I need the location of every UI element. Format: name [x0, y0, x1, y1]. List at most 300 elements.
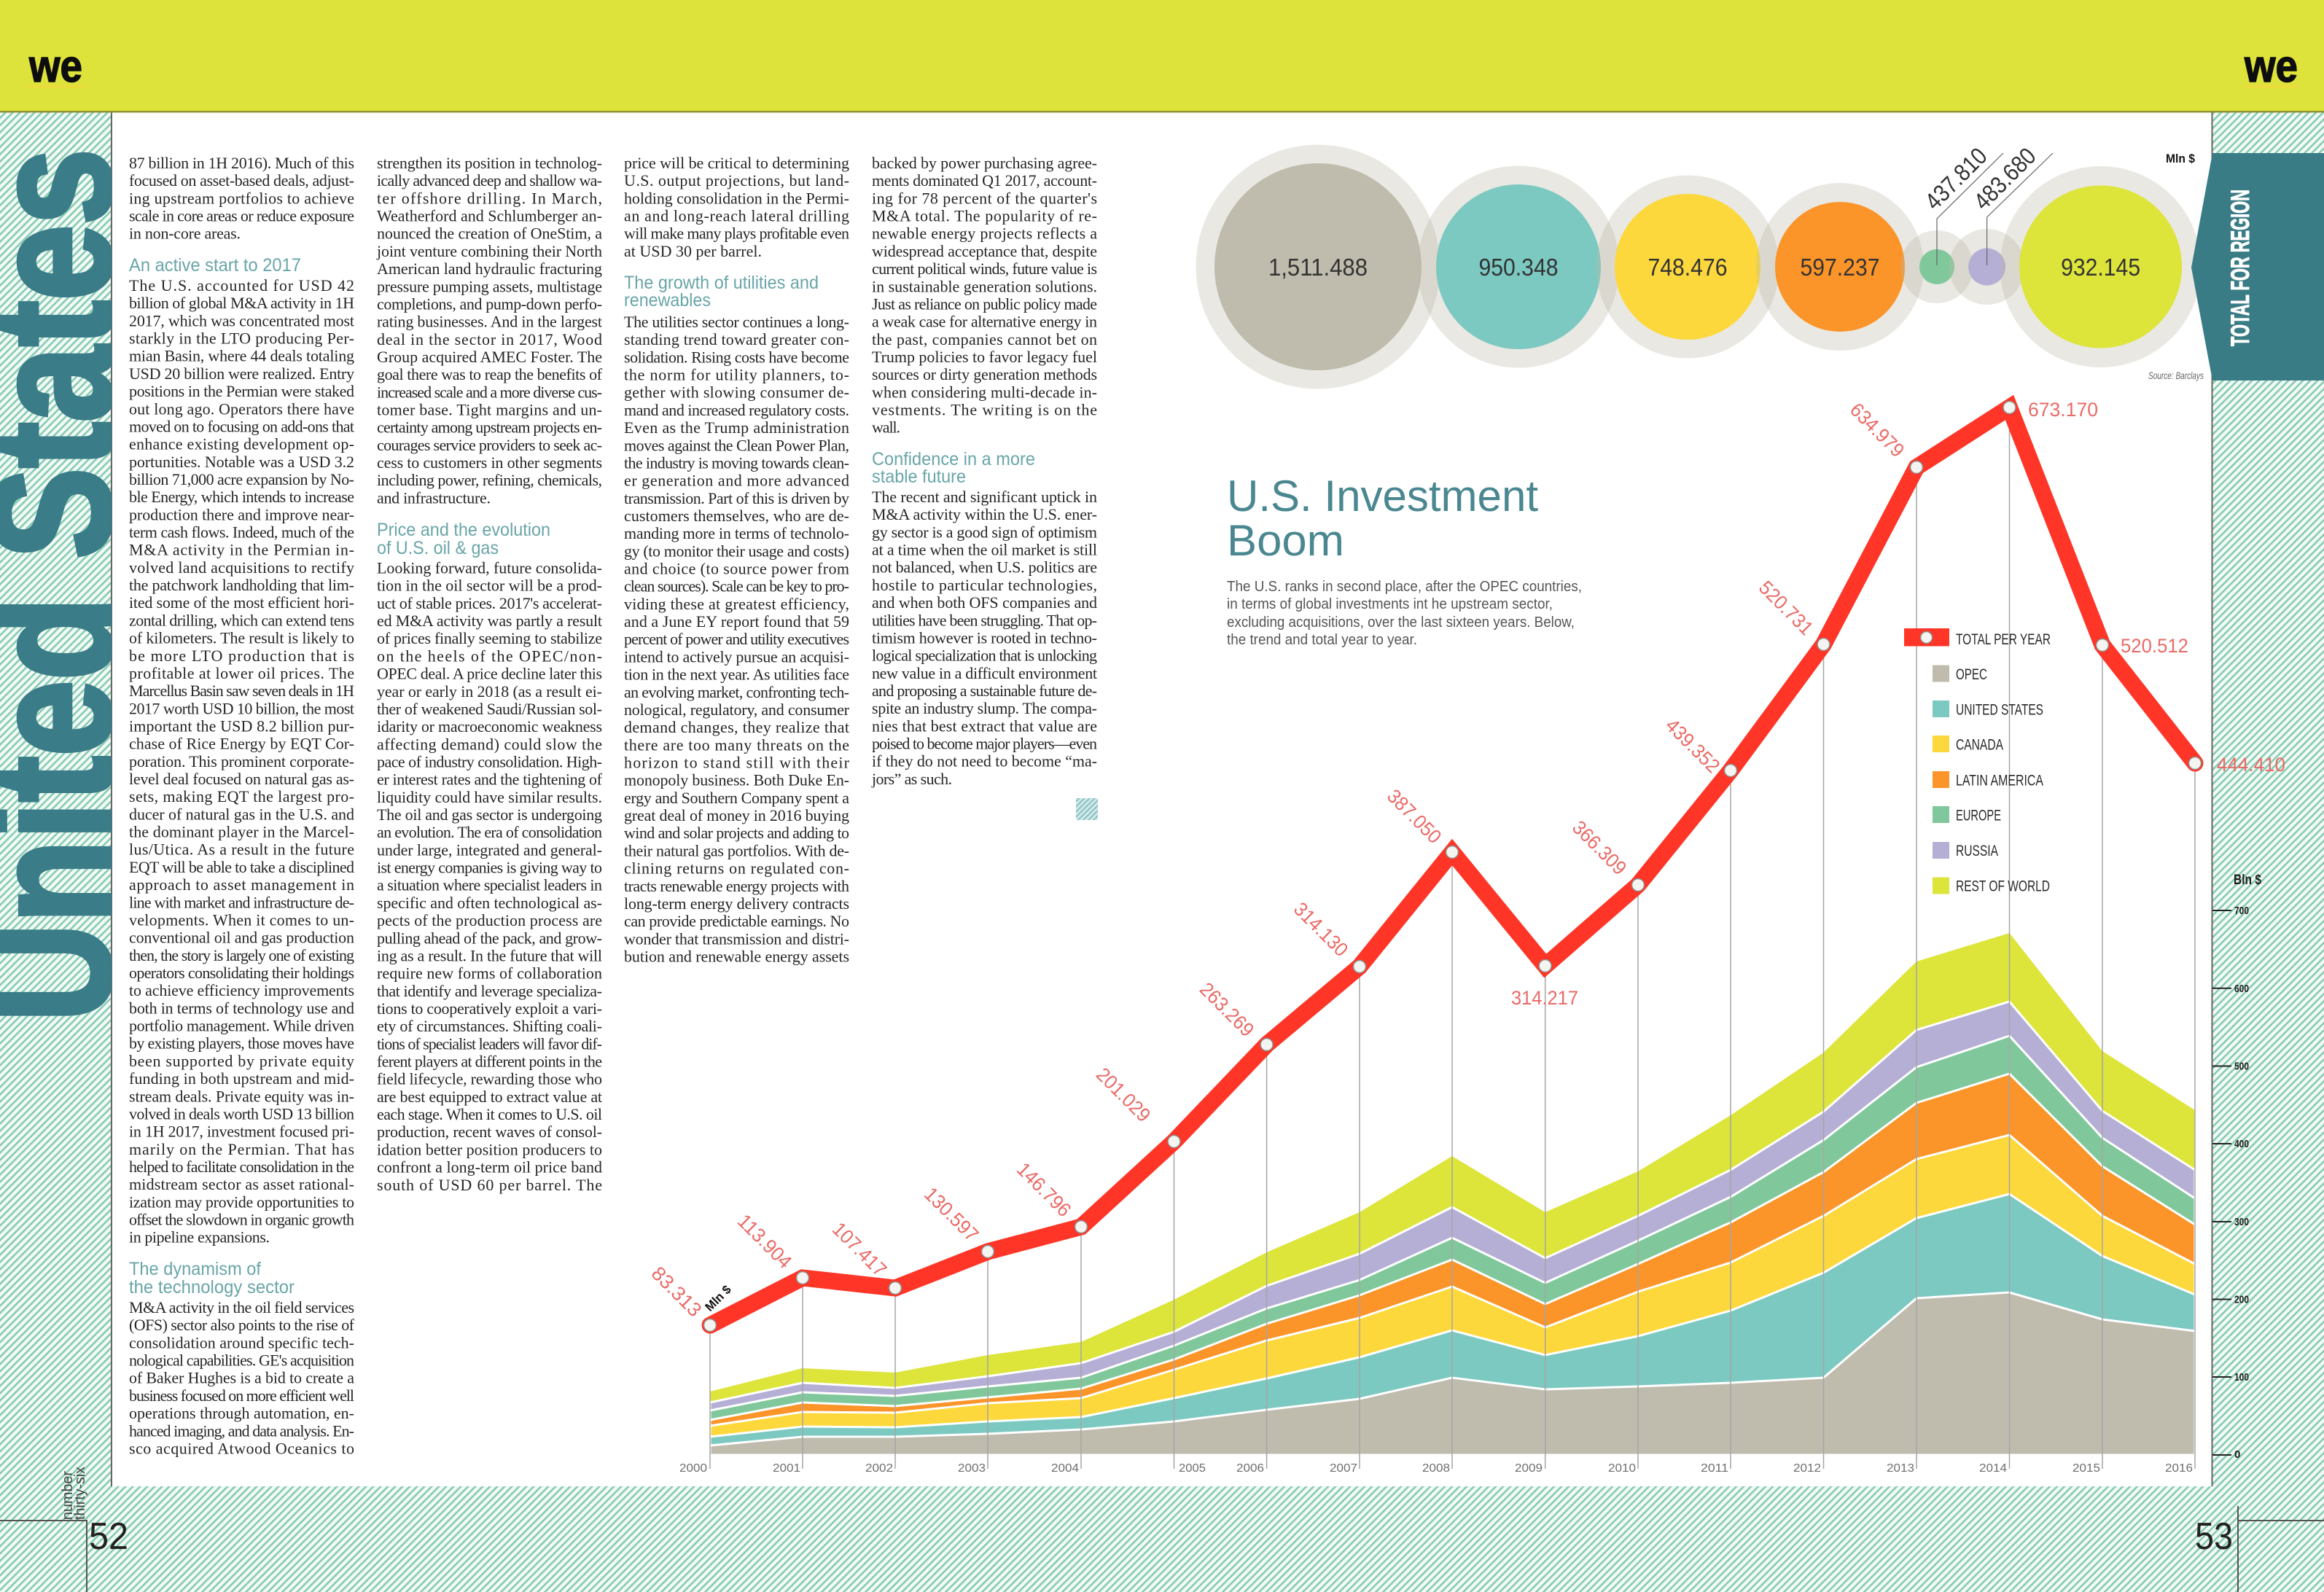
text block: column 4 main: and proposing a sustainable future de-: [872, 682, 1097, 700]
data value labels: 263.269: [1196, 978, 1258, 1041]
red total line: [710, 407, 2195, 1325]
area: Canada: [710, 1135, 2195, 1455]
text block: column 1 final: [129, 1298, 355, 1457]
heading: The growth of utilities and renewables: The growth of utilities and: [624, 273, 819, 293]
data value labels: 107.417: [828, 1218, 891, 1281]
text block: column 1 main: offset the slowdown in organic growth: [129, 1210, 354, 1229]
year labels: 2000: [679, 1462, 707, 1475]
side tab: total for region: TOTAL FOR REGION: [2226, 190, 2255, 346]
intro paragraph: [1227, 579, 1582, 648]
text block: column 4 main: not balanced, when U.S. politics are: [872, 558, 1097, 577]
year labels: 2004: [1051, 1462, 1079, 1475]
legend item: Russia: [1933, 842, 1998, 859]
issue label: number thirty-six: thirty-six: [72, 1467, 88, 1520]
bubble values: 748.476: [1648, 254, 1728, 281]
text block: column 2 top: joint venture combining their North: [376, 242, 602, 260]
text block: column 3 main: demand changes, they realize that: [624, 718, 849, 736]
text block: column 1 main: midstream sector as asset rational-: [129, 1175, 354, 1193]
text block: column 4 main: at a time when the oil market is still: [872, 541, 1097, 558]
text block: column 1 main: The U.S. accounted for USD 42: [129, 276, 354, 294]
year labels: [679, 1462, 2193, 1475]
text block: column 3 main: clean sources). Scale can be key to pro-: [624, 577, 849, 596]
text block: column 3 main: transmission. Part of this is driven by: [624, 489, 849, 507]
text block: column 3 main: Even as the Trump administration: [624, 418, 849, 437]
text block: column 1 main: volved land acquisitions to rectify: [129, 558, 354, 577]
text block: column 1 final: sco acquired Atwood Oceanics to: [129, 1439, 354, 1457]
bubble values: [1268, 142, 2140, 281]
text block: column 2 main: ety of circumstances. Shifting coali-: [377, 1017, 602, 1035]
text block: column 4 main: poised to become major players—even: [872, 735, 1097, 752]
text block: column 1 main: term cash flows. Indeed, much of the: [129, 523, 354, 541]
text block: column 3 main: standing trend toward greater con-: [624, 330, 849, 348]
heading: The growth of utilities and renewables: renewables: [624, 290, 711, 311]
leader lines for small bubbles: [1937, 153, 2053, 265]
side tab: total for region: [2191, 153, 2324, 381]
text block: column 3 top: holding consolidation in the Permi-: [624, 189, 849, 207]
text block: column 1 main: EQT will be able to take a disciplined: [129, 858, 354, 876]
text block: column 1 main: be more LTO production that is: [129, 647, 354, 665]
text block: column 4 main: timism however is rooted in techno-: [872, 628, 1097, 647]
text block: column 4 main: new value in a difficult environment: [872, 664, 1097, 682]
text block: column 1 main: moved on to focusing on add-ons that: [129, 417, 354, 435]
data value labels: 201.029: [1092, 1064, 1155, 1126]
text block: column 3 main: bution and renewable energy assets: [624, 948, 849, 965]
text block: column 1 main: poration. This prominent corporate-: [129, 752, 354, 770]
issue label: number thirty-six: number: [60, 1471, 76, 1520]
text block: column 1 main: sets, making EQT the largest pro-: [129, 787, 354, 805]
y axis scale: 700: [2234, 905, 2249, 917]
text block: column 1 main: approach to asset management in: [129, 875, 354, 894]
bubble: United States: [1417, 166, 1620, 367]
text block: column 2 main: production, recent waves of consol-: [377, 1123, 602, 1141]
year labels: 2006: [1236, 1462, 1264, 1475]
text block: column 2 main: require new forms of collaboration: [377, 964, 602, 983]
text block: column 1 main: both in terms of technology use and: [129, 999, 354, 1017]
year labels: 2007: [1330, 1462, 1357, 1475]
legend item: Rest of World: [1933, 878, 2050, 895]
text block: column 2 main: field lifecycle, rewarding those who: [377, 1070, 602, 1088]
text block: column 2 main: year or early in 2018 (as a result ei-: [377, 682, 602, 701]
intro paragraph: excluding acquisitions, over the last sixteen years. Below,: [1227, 614, 1575, 631]
text block: column 4 main: jors” as such.: [871, 770, 952, 788]
intro paragraph: the trend and total year to year.: [1227, 632, 1417, 648]
y axis scale: 200: [2234, 1293, 2249, 1306]
legend item: Canada: [1933, 735, 2003, 754]
heading: The dynamism of the technology sector: The dynamism of: [129, 1259, 261, 1279]
legend item: Latin America: LATIN AMERICA: [1956, 773, 2043, 789]
text block: column 4 main: hostile to particular technologies,: [872, 576, 1097, 594]
text block: column 1 main: the dominant player in the Marcel-: [129, 823, 354, 841]
text block: column 1 main: by existing players, those moves have: [129, 1034, 354, 1053]
text block: column 3 main: moves against the Clean Power Plan,: [624, 436, 849, 454]
text block: column 4 main: M&A activity within the U.S. ener-: [872, 505, 1097, 523]
data value labels: 146.796: [1013, 1158, 1075, 1221]
heading: Confidence in a more stable future: [872, 449, 1035, 487]
text block: column 1 main: line with market and infrastructure de-: [129, 893, 354, 911]
text block: column 3 main: percent of power and utility executives: [624, 630, 849, 648]
heading: Price and the evolution of U.S. oil & gas: Price and the evolution: [377, 520, 550, 540]
bubble: Europe: [1900, 230, 1973, 303]
text block: column 3 main: gether with slowing consumer de-: [624, 383, 849, 402]
text block: column 3 main: solidation. Rising costs have become: [624, 348, 849, 366]
text block: column 3 main: nological, regulatory, and consumer: [624, 701, 850, 719]
text block: column 3 main: er generation and more advanced: [624, 472, 849, 490]
text block: column 2 top: and infrastructure.: [377, 488, 491, 507]
text block: column 2 top: courages service providers to seek ac-: [377, 436, 602, 454]
year labels: 2015: [2073, 1462, 2100, 1475]
text block: column 1 main: important the USD 8.2 billion pur-: [129, 717, 354, 735]
legend item: OPEC: [1933, 665, 1987, 683]
text block: column 1 final: consolidation around specific tech-: [129, 1333, 354, 1351]
y axis scale: 100: [2234, 1371, 2249, 1384]
text block: column 2 top: [376, 154, 603, 507]
text block: column 1 final: operations through automation, en-: [129, 1404, 354, 1422]
text block: column 2 main: ferent players at different points in the: [377, 1053, 602, 1070]
text block: column 4 top: newable energy projects reflects a: [872, 225, 1097, 243]
text block: column 1 main: the patchwork landholding that lim-: [129, 576, 354, 594]
data value labels: 366.309: [1568, 816, 1631, 879]
text block: column 1 main: positions in the Permian were staked: [129, 382, 354, 400]
bubble: Latin America: [1756, 183, 1924, 351]
text block: column 1 main: starkly in the LTO producing Per-: [129, 329, 354, 347]
text block: column 2 top: certainty among upstream projects en-: [377, 418, 602, 437]
y axis scale: [2212, 873, 2261, 1461]
text block: column 1 main: volved in deals worth USD 13 billion: [129, 1104, 354, 1123]
text block: column 1 main: enhance existing development op-: [129, 435, 354, 453]
text block: column 3 top: an and long-reach lateral drilling: [624, 207, 849, 225]
text block: column 3 main: long-term energy delivery contracts: [624, 894, 849, 913]
text block: column 4 top: current political winds, future value is: [872, 260, 1097, 278]
text block: column 4 top: when considering multi-decade in-: [872, 383, 1097, 401]
text block: column 2 main: idarity or macroeconomic weakness: [377, 717, 602, 735]
data value labels: 634.979: [1846, 399, 1908, 461]
bubble: Rest of World: [2000, 166, 2202, 367]
text block: column 4 main: logical specialization that is unlocking: [872, 647, 1097, 665]
text block: column 2 main: uct of stable prices. 2017's accelerat-: [377, 594, 602, 612]
text block: column 1 main: billion of global M&A activity in 1H: [129, 294, 354, 312]
issue label: number thirty-six: [60, 1467, 88, 1520]
text block: column 3 main: and choice (to source power from: [624, 560, 849, 577]
text block: column 2 top: Weatherford and Schlumberger an-: [377, 207, 602, 225]
text block: column 1 main: Marcellus Basin saw seven deals in 1H: [129, 682, 354, 700]
text block: column 3 main: ergy and Southern Company spent a: [624, 789, 849, 807]
text block: column 1 main: level deal focused on natural gas as-: [129, 770, 354, 788]
text block: column 2 main: tion in the oil sector will be a prod-: [377, 577, 602, 595]
text block: column 1 intro: ing upstream portfolios to achieve: [129, 189, 354, 207]
text block: column 2 main: each stage. When it comes to U.S. oil: [377, 1105, 602, 1123]
y axis scale: 400: [2234, 1138, 2249, 1150]
text block: column 2 top: increased scale and a more diverse cus-: [377, 383, 602, 401]
text block: column 3 main: intend to actively pursue an acquisi-: [624, 647, 849, 666]
text block: column 1 main: then, the story is largely one of existing: [129, 946, 354, 964]
y axis ticks: [2212, 910, 2231, 1455]
text block: column 1 main: [129, 276, 354, 1246]
text block: column 2 top: ically advanced deep and shallow wa-: [377, 171, 602, 190]
heading: Confidence in a more stable future: stable future: [872, 467, 966, 487]
text block: column 2 top: cess to customers in other segments: [377, 453, 602, 472]
text block: column 3 main: great deal of money in 2016 buying: [624, 806, 849, 824]
text block: column 1 main: 2017 worth USD 10 billion, the most: [129, 699, 354, 717]
y axis scale: 600: [2234, 983, 2249, 995]
area: Latin America: [710, 1074, 2195, 1455]
text block: column 1 main: USD 20 billion were realized. Entry: [129, 364, 354, 383]
folio left: 52: 52: [89, 1515, 128, 1558]
legend: [1904, 628, 2051, 895]
area: Europe: [710, 1036, 2195, 1455]
title: [1227, 472, 1538, 565]
text block: column 1 main: lus/Utica. As a result in the future: [129, 840, 354, 859]
bubble values: 483.680: [1968, 142, 2041, 215]
legend item: Europe: [1933, 806, 2001, 824]
text block: column 2 main: OPEC deal. A price decline later this: [377, 665, 602, 683]
text block: column 2 main: pulling ahead of the pack, and grow-: [377, 929, 602, 947]
text block: column 2 main: of prices finally seeming to stabilize: [377, 629, 602, 647]
text block: column 2 main: south of USD 60 per barrel. The: [377, 1176, 602, 1194]
text block: column 1 main: chase of Rice Energy by EQT Cor-: [129, 735, 354, 753]
text block: column 4 top: in sustainable generation solutions.: [872, 277, 1097, 295]
text block: column 3 main: monopoly business. Both Duke En-: [624, 771, 849, 789]
text block: column 3 main: [624, 313, 850, 965]
data value labels: 130.597: [920, 1183, 983, 1246]
text block: column 4 top: Just as reliance on public policy made: [872, 294, 1097, 313]
year labels: 2010: [1608, 1462, 1636, 1475]
year labels: 2005: [1179, 1462, 1206, 1475]
text block: column 1 main: funding in both upstream and mid-: [129, 1069, 354, 1088]
year labels: 2009: [1515, 1462, 1543, 1475]
year labels: 2014: [1979, 1462, 2007, 1475]
text block: column 3 main: the norm for utility planners, to-: [624, 366, 849, 383]
text block: column 1 main: operators consolidating their holdings: [129, 964, 354, 982]
text block: column 2 top: rating businesses. And in the largest: [377, 313, 602, 331]
white content panel: [112, 112, 2212, 1486]
text block: column 1 main: ble Energy, which intends to increase: [129, 488, 354, 506]
text block: column 4 top: ments dominated Q1 2017, account-: [872, 171, 1097, 190]
text block: column 1 main: of kilometers. The result is likely to: [129, 629, 354, 647]
text block: column 2 top: strengthen its position in technolog-: [377, 154, 602, 172]
data value labels: 444.410: [2217, 754, 2285, 776]
data value labels: 314.130: [1290, 898, 1352, 961]
text block: column 4 main: nies that best extract that value are: [872, 717, 1097, 735]
text block: column 1 main: ited some of the most efficient hori-: [129, 593, 354, 612]
legend item: Canada: CANADA: [1956, 736, 2003, 754]
text block: column 4 top: [872, 154, 1097, 437]
text block: column 1 final: nological capabilities. GE's acquisition: [129, 1351, 354, 1369]
text block: column 2 main: Looking forward, future consolida-: [377, 558, 602, 577]
text block: column 2 main: that identify and leverage specializa-: [377, 982, 602, 1000]
text block: column 2 main: on the heels of the OPEC/non-: [377, 647, 602, 665]
text block: column 2 main: affecting demand) could slow the: [377, 735, 602, 753]
bubble: OPEC: [1196, 144, 1440, 389]
text block: column 3 main: can provide predictable earnings. No: [624, 912, 849, 930]
text block: column 2 main: ed M&A activity was partly a result: [377, 612, 602, 630]
text block: column 4 top: ing for 78 percent of the quarter's: [872, 189, 1097, 207]
bubble chart: total for region: [1196, 142, 2202, 389]
text block: column 3 main: the industry is moving towards clean-: [624, 453, 849, 472]
legend item: Rest of World: REST OF WORLD: [1956, 878, 2050, 895]
stacked area chart: [710, 933, 2195, 1455]
text block: column 4 top: Trump policies to favor legacy fuel: [872, 348, 1097, 366]
text block: column 2 main: [377, 558, 603, 1194]
title: Boom: [1227, 516, 1344, 565]
text block: column 1 intro: focused on asset-based deals, adjust-: [129, 171, 354, 190]
text block: column 2 top: pressure pumping assets, multistage: [377, 277, 602, 295]
text block: column 4 top: wall.: [872, 418, 900, 437]
text block: column 4 main: utilities have been struggling. That op-: [872, 611, 1097, 629]
heading: Price and the evolution of U.S. oil & gas: of U.S. oil & gas: [377, 538, 499, 558]
text block: column 2 top: Group acquired AMEC Foster. The: [377, 348, 602, 366]
text block: column 3 main: there are too many threats on the: [624, 735, 849, 754]
legend item: Europe: EUROPE: [1956, 808, 2001, 824]
y axis scale: 300: [2234, 1216, 2249, 1228]
text block: column 1 intro: [129, 154, 354, 243]
text block: column 2 main: ing as a result. In the future that will: [377, 946, 602, 965]
text block: column 4 main: [871, 488, 1097, 788]
data value labels: 520.512: [2121, 635, 2188, 657]
data value labels: 314.217: [1511, 987, 1578, 1009]
area: Russia: [710, 1002, 2195, 1455]
legend item: total per year: [1904, 628, 2051, 648]
text block: column 4 top: the past, companies cannot bet on: [872, 330, 1097, 348]
year labels: 2003: [958, 1462, 986, 1475]
text block: column 2 top: tomer base. Tight margins and un-: [377, 401, 602, 418]
text block: column 3 top: will make many plays profitable even: [624, 225, 849, 243]
bubble values: 950.348: [1478, 254, 1559, 281]
text block: column 1 main: been supported by private equity: [129, 1052, 354, 1070]
intro paragraph: in terms of global investments int he upstream sector,: [1227, 596, 1553, 612]
text block: column 1 main: M&A activity in the Permian in-: [129, 541, 354, 559]
text block: column 4 top: M&A total. The popularity of re-: [872, 207, 1097, 225]
legend item: United States: [1933, 701, 2043, 719]
data value labels: 520.731: [1755, 577, 1817, 639]
text block: column 3 top: price will be critical to determining: [624, 154, 849, 172]
year labels: 2001: [773, 1462, 800, 1475]
text block: column 1 final: of Baker Hughes is a bid to create a: [129, 1369, 354, 1387]
logo left: we: [28, 42, 82, 92]
text block: column 3 main: viding these at greatest efficiency,: [624, 595, 849, 613]
text block: column 2 main: an evolution. The era of consolidation: [377, 823, 602, 841]
text block: column 1 main: production there and improve near-: [129, 505, 354, 523]
text block: column 3 main: an evolving market, confronting tech-: [624, 683, 849, 701]
text block: column 1 main: out long ago. Operators there have: [129, 399, 354, 418]
y axis scale: 500: [2234, 1060, 2249, 1073]
title: U.S. Investment: [1227, 472, 1538, 520]
y axis scale: 0: [2234, 1448, 2240, 1461]
year labels: 2008: [1422, 1462, 1450, 1475]
text block: column 2 main: pects of the production process are: [377, 911, 602, 929]
data value labels: 439.352: [1661, 714, 1724, 777]
text block: column 1 main: in 1H 2017, investment focused pri-: [129, 1123, 354, 1141]
data point markers: [704, 401, 2202, 1331]
text block: column 3 main: customers themselves, who are de-: [624, 507, 849, 525]
intro paragraph: The U.S. ranks in second place, after the OPEC countries,: [1227, 579, 1582, 595]
text block: column 3 main: mand and increased regulatory costs.: [624, 401, 849, 419]
heading: Confidence in a more stable future: Confidence in a more: [872, 449, 1035, 469]
year labels: 2016: [2165, 1462, 2193, 1475]
text block: column 4 top: vestments. The writing is on the: [872, 401, 1097, 418]
text block: column 2 top: including power, refining, chemicals,: [377, 471, 602, 489]
text block: column 2 top: nounced the creation of OneStim, a: [377, 225, 602, 243]
text block: column 1 intro: in non-core areas.: [129, 225, 241, 243]
text block: column 3 main: The utilities sector continues a long-: [624, 313, 849, 331]
folio right: 53: 53: [2195, 1515, 2233, 1558]
end-of-article mark: [1076, 798, 1098, 820]
text block: column 1 final: hanced imaging, and data analysis. En-: [129, 1421, 354, 1440]
text block: column 1 final: (OFS) sector also points to the rise of: [129, 1316, 355, 1334]
text block: column 1 intro: 87 billion in 1H 2016). Much of this: [129, 154, 354, 172]
source note: Source: Barclays: [2148, 370, 2204, 381]
text block: column 2 top: goal there was to reap the benefits of: [377, 365, 603, 383]
legend item: United States: UNITED STATES: [1956, 701, 2043, 719]
heading: The growth of utilities and renewables: [624, 273, 819, 311]
area: Rest of World: [710, 933, 2195, 1455]
text block: column 1 main: helped to facilitate consolidation in the: [129, 1158, 354, 1176]
text block: column 4 main: and when both OFS companies and: [872, 593, 1097, 612]
text block: column 1 intro: scale in core areas or reduce exposure: [129, 207, 354, 225]
text block: column 1 main: ducer of natural gas in the U.S. and: [129, 805, 354, 823]
text block: column 4 top: a weak case for alternative energy in: [872, 313, 1097, 331]
text block: column 2 top: deal in the sector in 2017, Wood: [377, 330, 602, 348]
year gridlines: [710, 407, 2195, 1469]
unit label: Mln $: Mln $: [2166, 152, 2195, 165]
text block: column 1 main: billion 71,000 acre expansion by No-: [129, 470, 354, 488]
data value labels: [647, 399, 2285, 1321]
bubble: Canada: [1596, 175, 1779, 359]
text block: column 3 main: and a June EY report found that 59: [624, 612, 849, 631]
text block: column 1 main: ization may provide opportunities to: [129, 1193, 354, 1211]
text block: column 2 main: ther of weakened Saudi/Russian sol-: [377, 700, 602, 718]
text block: column 1 main: portunities. Notable was a USD 3.2: [129, 453, 354, 471]
text block: column 2 main: confront a long-term oil price band: [377, 1158, 602, 1177]
text block: column 1 main: in pipeline expansions.: [129, 1228, 270, 1246]
text block: column 1 main: velopments. When it comes to un-: [129, 911, 354, 929]
text block: column 2 main: are best equipped to extract value at: [377, 1088, 602, 1106]
text block: column 2 main: ist energy companies is giving way to: [377, 859, 602, 877]
text block: column 2 top: ter offshore drilling. In March,: [377, 189, 602, 207]
year labels: 2011: [1701, 1462, 1728, 1475]
text block: column 2 main: a situation where specialist leaders in: [377, 876, 602, 894]
unit label on line: Mln $: Mln $: [703, 1282, 734, 1314]
bubble values: 597.237: [1801, 254, 1879, 281]
heading: The dynamism of the technology sector: the technology sector: [129, 1277, 295, 1298]
text block: column 3 top: at USD 30 per barrel.: [624, 242, 762, 260]
text block: column 1 main: profitable at lower oil prices. The: [129, 664, 354, 682]
text block: column 2 main: specific and often technological as-: [377, 894, 602, 912]
text block: column 4 top: widespread acceptance that, despite: [872, 242, 1097, 260]
area: United States: [710, 1194, 2195, 1455]
bubble values: 932.145: [2061, 254, 2140, 281]
logo right: we: [2244, 42, 2298, 92]
text block: column 3 main: wonder that transmission and distri-: [624, 929, 849, 948]
text block: column 1 final: business focused on more efficient well: [129, 1386, 354, 1405]
heading: Price and the evolution of U.S. oil & gas: [377, 520, 550, 558]
text block: column 2 main: pace of industry consolidation. High-: [377, 752, 602, 771]
text block: column 1 main: conventional oil and gas production: [129, 929, 354, 947]
year labels: 2002: [865, 1462, 893, 1475]
y axis unit: Bln $: Bln $: [2234, 873, 2261, 888]
text block: column 4 main: The recent and significant uptick in: [872, 488, 1097, 506]
text block: column 3 main: tion in the next year. As utilities face: [624, 666, 849, 684]
legend item: Latin America: [1933, 771, 2043, 789]
text block: column 1 main: stream deals. Private equity was in-: [129, 1087, 354, 1105]
text block: column 3 main: wind and solar projects and adding to: [624, 824, 849, 842]
text block: column 2 main: The oil and gas sector is undergoing: [377, 805, 602, 824]
text block: column 2 main: er interest rates and the tightening of: [377, 770, 603, 789]
legend item: OPEC: OPEC: [1956, 666, 1987, 683]
bubble values: 437.810: [1919, 142, 1992, 215]
text block: column 4 top: sources or dirty generation methods: [872, 365, 1097, 383]
text block: column 4 top: backed by power purchasing agree-: [872, 154, 1097, 172]
text block: column 4 main: gy sector is a good sign of optimism: [872, 523, 1097, 541]
